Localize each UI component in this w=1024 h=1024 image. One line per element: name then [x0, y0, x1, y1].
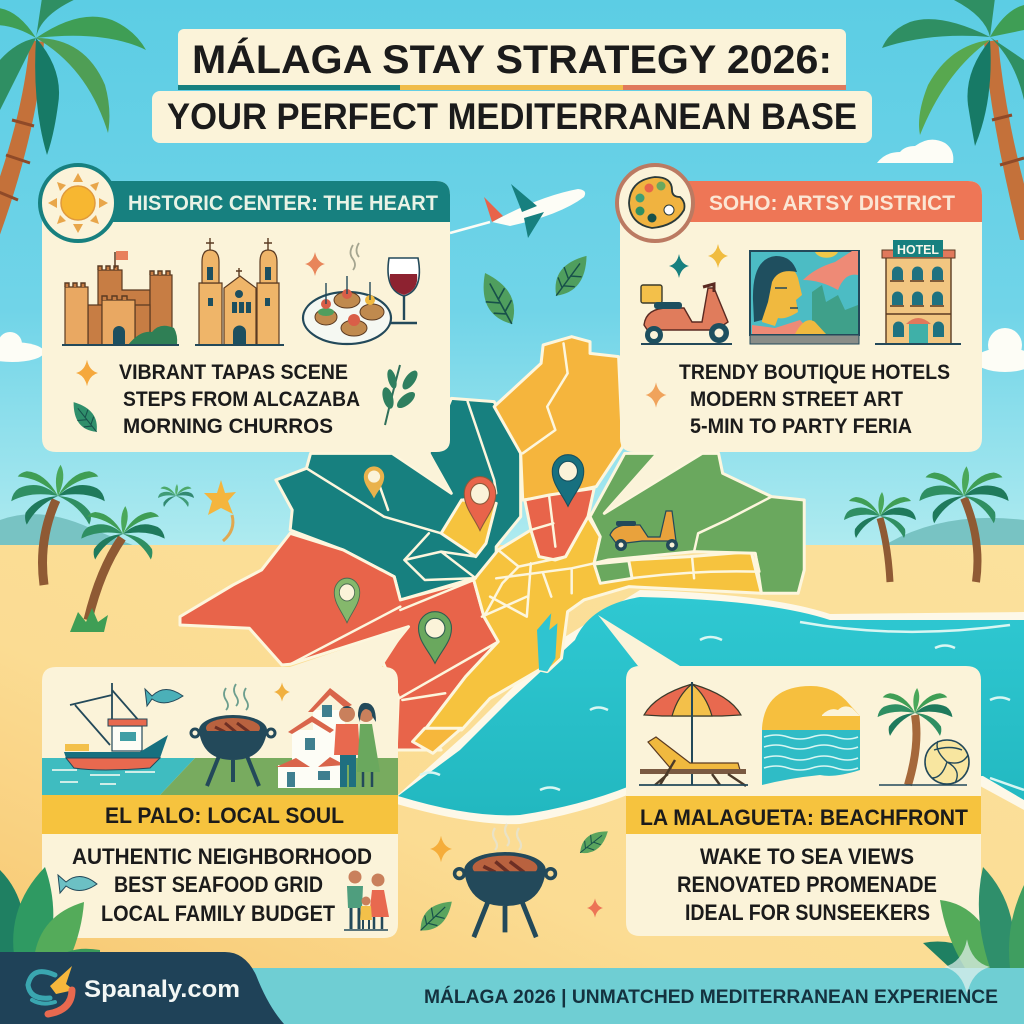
- district: teal: [276, 398, 521, 600]
- title line 2: YOUR PERFECT MEDITERRANEAN BASE: [167, 96, 857, 137]
- La Malagueta list: [677, 844, 937, 925]
- footer bar: [0, 968, 1024, 1024]
- beach leaves and stars: [414, 825, 612, 937]
- panel: Historic Center: [40, 165, 451, 493]
- sea: [390, 590, 1024, 824]
- star: [646, 382, 666, 408]
- icon: Spanaly logo: [28, 966, 74, 1014]
- district: small green block: [594, 561, 632, 583]
- stars: [669, 244, 728, 278]
- distant hills: [0, 514, 1024, 560]
- map pins: [334, 455, 584, 663]
- icon: palette badge: [617, 165, 693, 241]
- icon: volleyball: [879, 740, 969, 785]
- El Palo list: AUTHENTIC NEIGHBORHOOD: [72, 844, 372, 869]
- El Palo list: [72, 844, 372, 926]
- icon: family: [334, 703, 380, 787]
- El Palo header band: EL PALO: LOCAL SOUL: [105, 803, 344, 828]
- Historic Center header band: HISTORIC CENTER: THE HEART: [128, 192, 438, 215]
- sand background: [0, 545, 1024, 1024]
- harbour inlet: [537, 613, 557, 672]
- district: yellow with pin: [441, 500, 496, 557]
- SOHO list: MODERN STREET ART: [690, 388, 903, 411]
- Historic Center list: MORNING CHURROS: [123, 415, 333, 438]
- floating leaves: [473, 249, 594, 330]
- icon: umbrella and lounger: [639, 682, 748, 786]
- icon: leaf: [66, 398, 103, 437]
- icon: scooter: [641, 284, 732, 344]
- district: central yellow: [425, 517, 761, 730]
- panel: La Malagueta: [598, 615, 981, 936]
- La Malagueta header band: LA MALAGUETA: BEACHFRONT: [640, 805, 969, 830]
- palm: top right: [882, 0, 1024, 240]
- Historic Center header band: [100, 181, 450, 222]
- scooter on map: [610, 511, 678, 551]
- district: coral: [180, 533, 498, 750]
- icon: hotel: HOTEL: [897, 242, 939, 257]
- icon: fish small: [58, 875, 97, 893]
- steam: [493, 824, 521, 850]
- palm: top left: [0, 0, 146, 240]
- star: [76, 360, 98, 386]
- El Palo ground strip: [42, 758, 398, 795]
- icon: cathedral: [195, 238, 284, 345]
- icon: beach grill: [455, 852, 555, 937]
- icon: tapas plate and wine: [303, 243, 419, 344]
- district: green: [590, 453, 804, 593]
- panel: SOHO: [604, 165, 982, 513]
- star: [274, 682, 290, 702]
- icon: fishing boat: [52, 683, 168, 784]
- icon: street art: [750, 251, 859, 344]
- El Palo header band: [42, 795, 398, 834]
- foliage: bottom left: [0, 867, 100, 960]
- palms: right beach: [844, 466, 1009, 582]
- icon: grill: [191, 715, 275, 786]
- district: central coral: [525, 488, 594, 560]
- El Palo list: LOCAL FAMILY BUDGET: [101, 901, 335, 926]
- district: coast strip end: [413, 728, 462, 753]
- title line 1: [178, 29, 846, 90]
- icon: branch: [380, 365, 420, 425]
- icon: sunset over sea: [762, 686, 860, 785]
- SOHO list: TRENDY BOUTIQUE HOTELS: [679, 361, 950, 384]
- star: [305, 252, 325, 276]
- small palm and star in the sky: [158, 480, 236, 541]
- SOHO list: 5-MIN TO PARTY FERIA: [690, 415, 912, 438]
- Historic Center list: [119, 361, 360, 438]
- Historic Center list: STEPS FROM ALCAZABA: [123, 388, 360, 411]
- La Malagueta list: IDEAL FOR SUNSEEKERS: [685, 900, 930, 925]
- clouds: [0, 140, 1024, 372]
- SOHO list: [679, 361, 950, 438]
- SOHO header band: SOHO: ARTSY DISTRICT: [709, 192, 955, 215]
- map of Málaga districts: [180, 337, 804, 753]
- icon: fish: [145, 689, 183, 706]
- SOHO header band: [670, 181, 982, 222]
- palms: left beach: [11, 465, 165, 632]
- icon: palm: [878, 688, 952, 785]
- footer tagline: MÁLAGA 2026 | UNMATCHED MEDITERRANEAN EXPERIENCE: [424, 986, 998, 1008]
- icon: small family: [344, 870, 389, 930]
- title line 1: MÁLAGA STAY STRATEGY 2026:: [192, 37, 832, 82]
- Historic Center list: VIBRANT TAPAS SCENE: [119, 361, 348, 384]
- La Malagueta list: RENOVATED PROMENADE: [677, 872, 937, 897]
- district: orange: [494, 337, 623, 500]
- icon: castle: [62, 251, 179, 345]
- steam: [224, 684, 248, 710]
- footer logo block: [0, 952, 284, 1024]
- brand name: Spanaly.com: [84, 976, 240, 1003]
- icon: white houses: [276, 688, 352, 788]
- foliage: bottom right: [923, 867, 1024, 968]
- La Malagueta list: WAKE TO SEA VIEWS: [700, 844, 914, 869]
- icon: sun badge: [40, 165, 116, 241]
- title: [152, 29, 872, 143]
- plane: [450, 184, 585, 238]
- icon: hotel: [875, 240, 961, 344]
- El Palo list: BEST SEAFOOD GRID: [114, 872, 323, 897]
- sparkle: [944, 939, 990, 995]
- La Malagueta header band: [626, 796, 981, 834]
- panel: El Palo: [42, 627, 408, 938]
- sky background: [0, 0, 1024, 560]
